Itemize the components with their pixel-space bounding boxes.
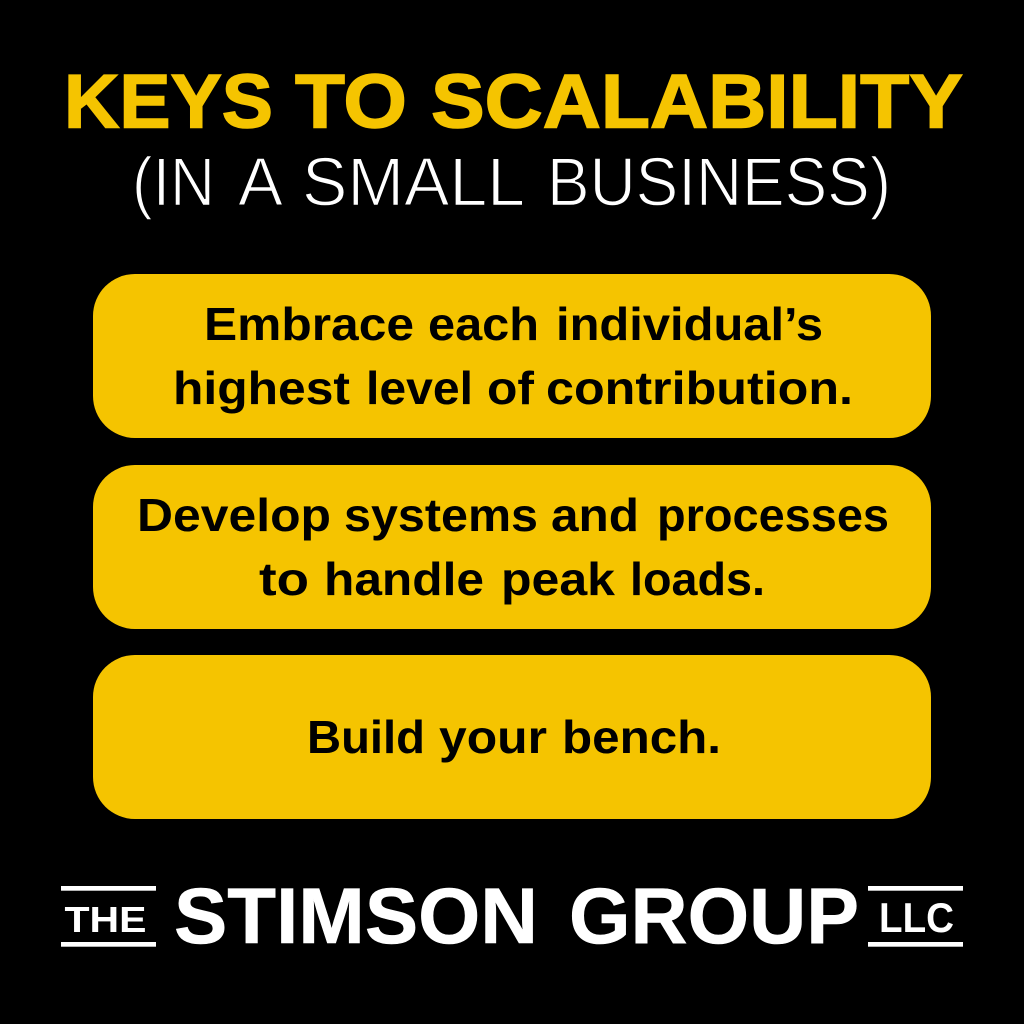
- panel: key 2: [93, 465, 931, 629]
- logo: The Stimson Group LLC: GROUP: [569, 871, 859, 960]
- title: SCALABILITY: [431, 60, 963, 144]
- panel: key 2: processes: [657, 489, 889, 541]
- logo: The Stimson Group LLC: THE: [64, 899, 146, 940]
- subtitle: A: [238, 144, 283, 220]
- panel: key 1: individual’s: [556, 298, 823, 350]
- panel: key 3: bench.: [562, 711, 721, 763]
- logo: The Stimson Group LLC: [61, 871, 963, 960]
- logo: The Stimson Group LLC: STIMSON: [174, 871, 538, 960]
- subtitle: [132, 144, 891, 220]
- panel: key 2: and: [551, 489, 639, 541]
- panel: key 2: systems: [344, 489, 538, 541]
- panel: key 1: each: [428, 298, 539, 350]
- subtitle: (IN: [132, 144, 215, 220]
- title: KEYS: [64, 60, 273, 144]
- panel: key 3: [93, 655, 931, 819]
- title: TO: [295, 60, 407, 144]
- panel: key 2: to: [259, 553, 309, 605]
- panel: key 1: highest: [173, 362, 350, 414]
- panel: key 1: level: [366, 362, 473, 414]
- panel: key 2: loads.: [630, 553, 765, 605]
- panel: key 1: Embrace: [204, 298, 414, 350]
- logo: The Stimson Group LLC: LLC: [879, 894, 954, 941]
- subtitle: SMALL: [302, 144, 525, 220]
- panel: key 2: peak: [501, 553, 615, 605]
- panel: key 1: [93, 274, 931, 438]
- panel: key 2: handle: [324, 553, 484, 605]
- panel: key 3: Build: [307, 711, 425, 763]
- panel: key 3: your: [439, 711, 547, 763]
- subtitle: BUSINESS): [547, 144, 891, 220]
- title: [64, 60, 963, 144]
- panel: key 1: contribution.: [546, 362, 853, 414]
- panel: key 2: Develop: [137, 489, 331, 541]
- panel: key 1: of: [487, 362, 535, 414]
